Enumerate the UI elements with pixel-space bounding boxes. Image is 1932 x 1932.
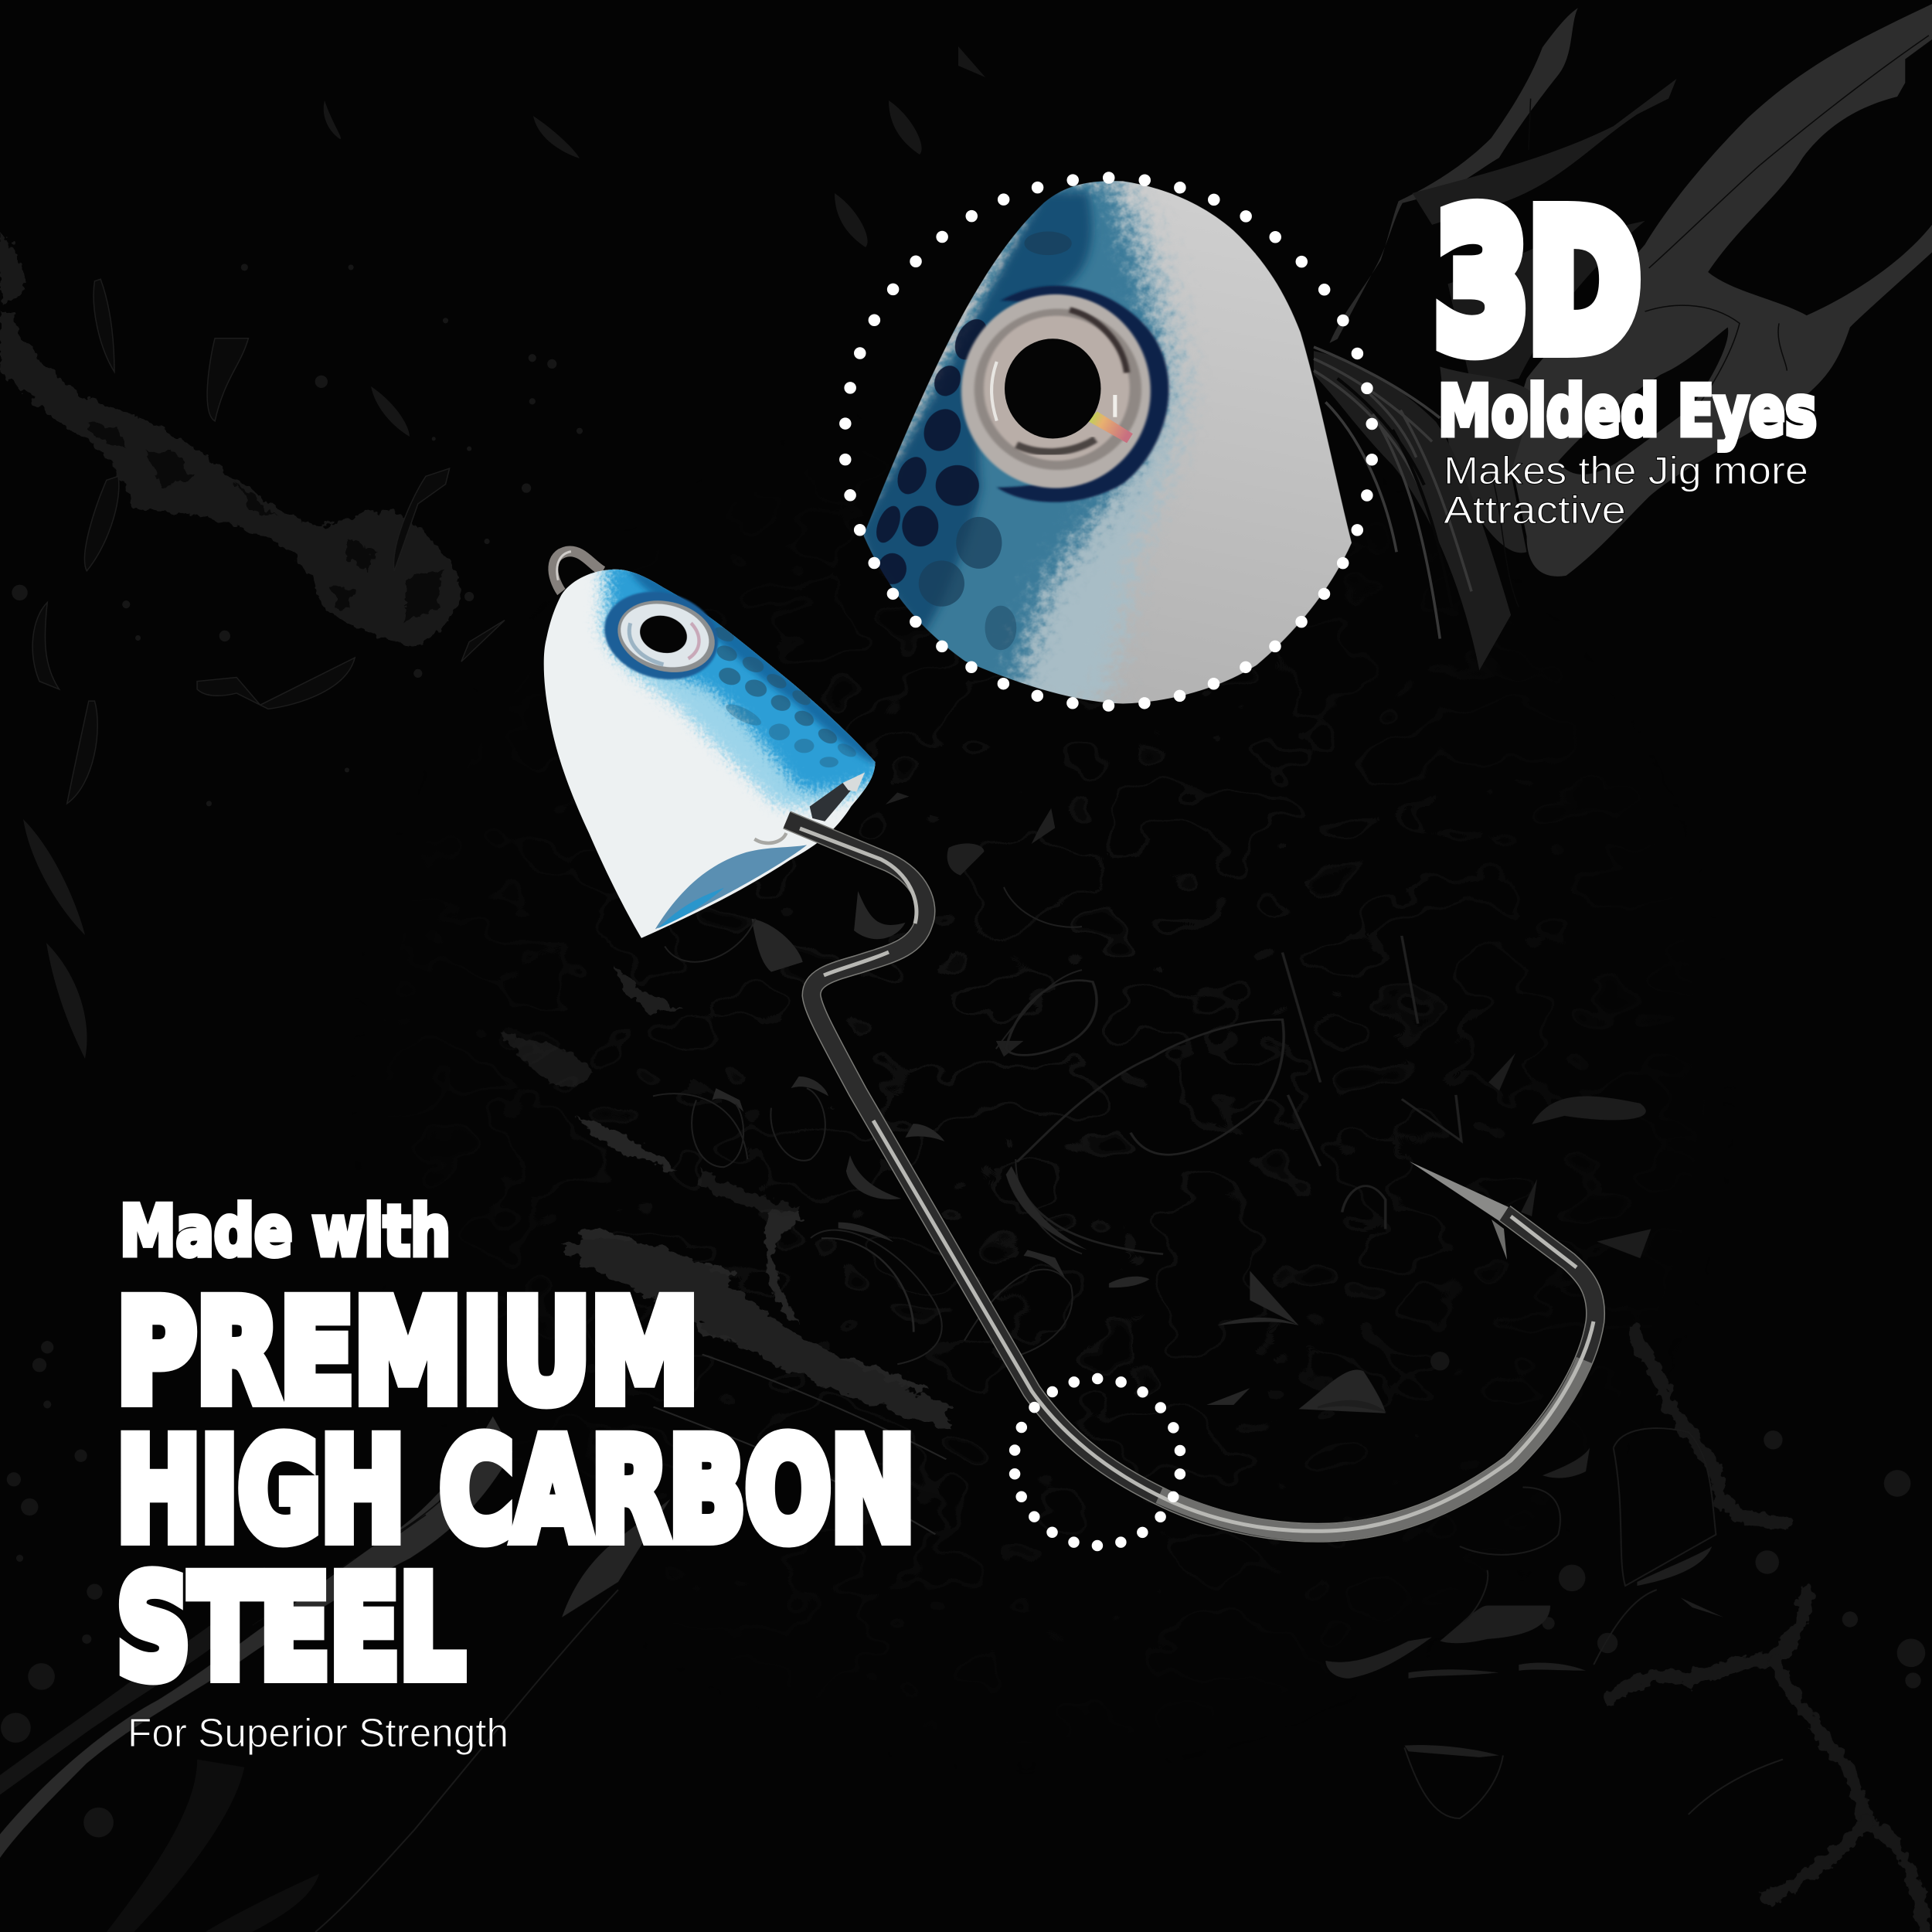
background swirl: lower left diagonal streak bbox=[0, 1341, 670, 1932]
background swirl: left splash bbox=[0, 232, 583, 806]
background swirl: centre right worm marks bbox=[1006, 936, 1651, 1413]
background swirl: bottom right branching splash bbox=[1318, 1329, 1925, 1932]
dotted circle: hook steel callout bbox=[1014, 1379, 1181, 1546]
icon: small 3D eye bbox=[597, 581, 726, 690]
heading: PREMIUM: PREMIUM bbox=[117, 1272, 699, 1434]
fish scale pattern bbox=[713, 624, 858, 767]
mouth hook tie loop bbox=[754, 833, 786, 843]
heading: STEEL: STEEL bbox=[117, 1548, 464, 1709]
mouth opening bbox=[655, 845, 807, 929]
description: makes the jig more attractive: Attractive bbox=[1444, 488, 1626, 532]
hook: wire shank, bend and barb bbox=[787, 820, 1596, 1532]
description: makes the jig more attractive: Makes the Jig more bbox=[1444, 449, 1808, 492]
icon: line eyelet bbox=[553, 551, 603, 592]
heading: 3D: 3D bbox=[1435, 175, 1640, 391]
description: for superior strength: For Superior Strength bbox=[128, 1711, 509, 1756]
jig head: small full product bbox=[526, 549, 884, 948]
jig body with blue back bbox=[526, 549, 884, 948]
text block: premium high carbon steel bbox=[117, 1191, 915, 1756]
dotted circle: eye callout bbox=[845, 178, 1372, 706]
background swirl: marble behind headline bbox=[561, 1238, 951, 1534]
background swirl: lower centre rings bbox=[503, 793, 1082, 1391]
fish scale pattern bbox=[876, 318, 986, 584]
background swirl: top right marble streaks bbox=[1314, 4, 1932, 670]
heading: Made with: Made with bbox=[120, 1191, 451, 1272]
icon: large 3D eye bbox=[961, 286, 1168, 502]
heading: Molded Eyes: Molded Eyes bbox=[1438, 371, 1817, 452]
description: makes the jig more attractive bbox=[1444, 449, 1808, 532]
heading: HIGH CARBON: HIGH CARBON bbox=[117, 1410, 915, 1572]
text block: 3D molded eyes bbox=[1435, 175, 1817, 532]
background swirl: top and centre streak marks bbox=[23, 46, 985, 1059]
zoomed eye detail: enlarged jig head bbox=[851, 173, 1363, 709]
